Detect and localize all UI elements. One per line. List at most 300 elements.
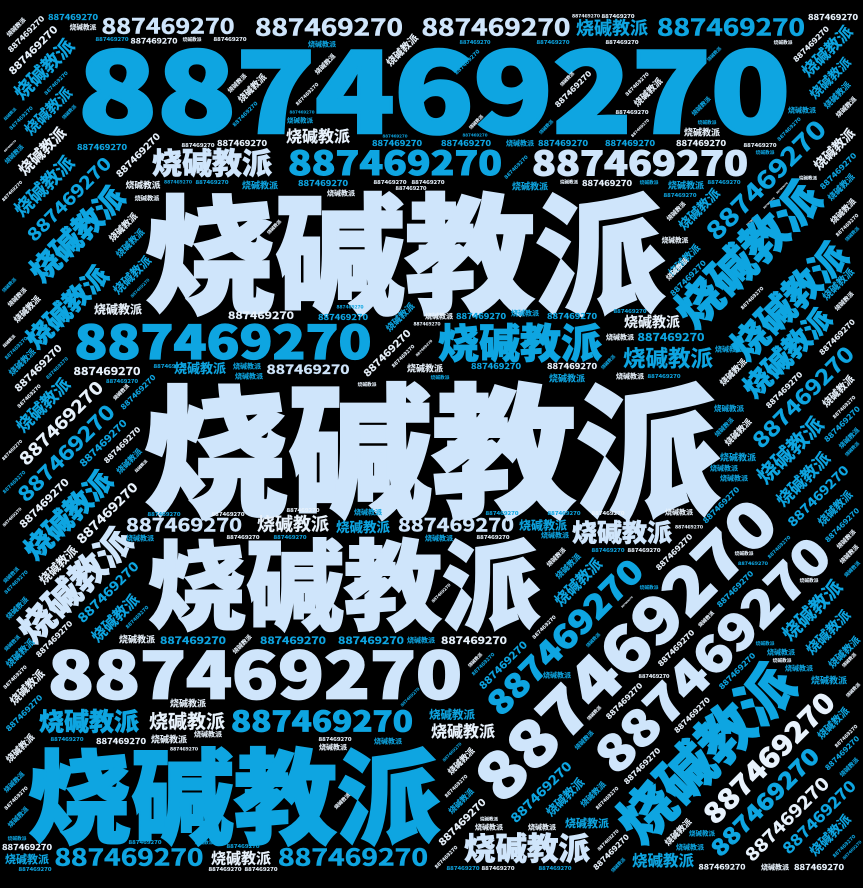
- small horizontal words, upper half: 烧碱教派: [126, 179, 161, 190]
- diagonal words, right column: 烧碱教派: [838, 543, 860, 565]
- medium horizontal words: 烧碱教派: [464, 831, 590, 867]
- diagonal words, left column: 烧碱教派: [106, 210, 140, 244]
- diagonal words, right column: 烧碱教派: [737, 303, 838, 404]
- small horizontal words, upper half: 887469270: [290, 109, 315, 115]
- diagonal words, centre gaps: 887469270: [453, 48, 481, 76]
- diagonal words, right column: 烧碱教派: [819, 265, 857, 303]
- diagonal words, right column: 887469270: [834, 724, 859, 749]
- diagonal words, centre gaps: 887469270: [621, 745, 664, 787]
- diagonal words, centre gaps: 烧碱教派: [609, 856, 627, 874]
- diagonal words, right column: 887469270: [738, 770, 834, 866]
- diagonal words, left column: 887469270: [45, 356, 70, 381]
- small horizontal words, lower half: 烧碱教派: [767, 648, 795, 657]
- small horizontal words, lower half: 887469270: [338, 632, 404, 647]
- diagonal words, right column: 烧碱教派: [723, 416, 754, 448]
- small horizontal words, lower half: 烧碱教派: [528, 823, 556, 832]
- small horizontal words, middle band: 烧碱教派: [519, 517, 567, 532]
- small horizontal words, middle band: 烧碱教派: [126, 534, 154, 543]
- small horizontal words, middle band: 887469270: [547, 311, 597, 322]
- diagonal words, left column: 烧碱教派: [113, 226, 147, 260]
- diagonal words, right column: 887469270: [778, 776, 861, 858]
- small horizontal words, middle band: 烧碱教派: [606, 333, 634, 342]
- small horizontal words, upper half: [48, 12, 858, 244]
- diagonal words, right column: [655, 22, 863, 866]
- small horizontal words, middle band: 烧碱教派: [714, 403, 744, 413]
- diagonal words, centre gaps: 887469270: [552, 68, 595, 110]
- word: giant blue number: 887469270: [78, 5, 790, 165]
- small horizontal words, lower half: 烧碱教派: [785, 664, 813, 673]
- diagonal words, left column: 烧碱教派: [7, 667, 48, 708]
- medium horizontal words: 烧碱教派: [632, 851, 694, 870]
- medium horizontal words: 887469270: [102, 10, 234, 40]
- diagonal words, left column: 烧碱教派: [18, 465, 119, 566]
- word: pale phrase, lower centre: 烧碱教派: [148, 532, 540, 642]
- diagonal words, left column: 887469270: [3, 785, 30, 812]
- small horizontal words, upper half: 887469270: [96, 36, 128, 43]
- small horizontal words, middle band: 烧碱教派: [358, 381, 377, 388]
- diagonal words, left column: 887469270: [113, 130, 163, 180]
- small horizontal words, middle band: 烧碱教派: [616, 372, 644, 381]
- diagonal words, centre gaps: 烧碱教派: [537, 118, 555, 136]
- medium horizontal words: 烧碱教派: [572, 519, 672, 547]
- diagonal words, right column: 烧碱教派: [690, 95, 712, 117]
- diagonal words, left column: 887469270: [101, 424, 144, 466]
- small horizontal words, middle band: 烧碱教派: [354, 508, 382, 517]
- diagonal words, left column: 887469270: [10, 397, 120, 507]
- diagonal words, left column: 887469270: [73, 557, 142, 626]
- diagonal words, centre gaps: 887469270: [595, 786, 620, 811]
- diagonal words, right column: 烧碱教派: [807, 55, 854, 102]
- diagonal words, right column: 887469270: [767, 535, 792, 560]
- small horizontal words, lower half: 烧碱教派: [151, 733, 187, 744]
- diagonal words, centre gaps: [226, 31, 713, 874]
- word: large blue phrase, bottom left: 烧碱教派: [28, 742, 440, 857]
- small horizontal words, lower half: 烧碱教派: [170, 697, 206, 708]
- small horizontal words, middle band: 887469270: [414, 322, 441, 328]
- small horizontal words, middle band: 887469270: [471, 361, 521, 372]
- diagonal words, right column: 887469270: [817, 150, 860, 192]
- small horizontal words, upper half: 烧碱教派: [788, 106, 816, 115]
- small horizontal words, upper half: 烧碱教派: [668, 179, 704, 190]
- diagonal words, left column: 烧碱教派: [112, 383, 131, 402]
- diagonal words, left column: 887469270: [125, 605, 150, 630]
- small horizontal words, middle band: 887469270: [148, 511, 180, 518]
- small horizontal words, lower half: 887469270: [260, 632, 326, 647]
- diagonal words, right column: 烧碱教派: [828, 196, 858, 226]
- small horizontal words, upper half: 烧碱教派: [242, 179, 278, 190]
- small horizontal words, upper half: 烧碱教派: [70, 22, 97, 31]
- diagonal words, right column: 887469270: [783, 461, 852, 530]
- small horizontal words, upper half: 887469270: [460, 39, 491, 46]
- diagonal words, left column: 887469270: [5, 13, 48, 55]
- medium horizontal words: 烧碱教派: [429, 707, 475, 721]
- medium horizontal words: 烧碱教派: [257, 515, 329, 535]
- small horizontal words, middle band: 887469270: [212, 511, 244, 518]
- small horizontal words, middle band: 887469270: [738, 561, 768, 567]
- small horizontal words, upper half: 烧碱教派: [308, 40, 336, 49]
- small horizontal words, middle band: 烧碱教派: [407, 362, 443, 373]
- small horizontal words, lower half: 887469270: [638, 673, 670, 680]
- diagonal words, right column: 烧碱教派: [843, 560, 862, 579]
- small horizontal words, lower half: 烧碱教派: [773, 657, 792, 664]
- diagonal words, left column: 烧碱教派: [3, 143, 25, 165]
- diagonal words, centre gaps: 烧碱教派: [231, 633, 253, 655]
- small horizontal words, upper half: 烧碱教派: [640, 179, 659, 186]
- small horizontal words, upper half: 烧碱教派: [327, 189, 355, 198]
- small horizontal words, lower half: 烧碱教派: [543, 671, 571, 680]
- small horizontal words, upper half: 887469270: [214, 36, 246, 43]
- small horizontal words, upper half: 烧碱教派: [684, 126, 720, 137]
- small horizontal words, middle band: 烧碱教派: [431, 374, 450, 381]
- diagonal words, centre gaps: 887469270: [434, 845, 459, 870]
- small horizontal words, lower half: 烧碱教派: [689, 828, 716, 837]
- diagonal words, right column: 烧碱教派: [837, 425, 862, 450]
- small horizontal words, upper half: 887469270: [196, 179, 228, 186]
- diagonal words, centre gaps: 烧碱教派: [663, 816, 694, 848]
- diagonal words, right column: 887469270: [693, 682, 843, 832]
- diagonal words, centre gaps: 烧碱教派: [552, 556, 606, 610]
- small horizontal words, lower half: 887469270: [226, 843, 260, 850]
- diagonal words, right column: 887469270: [745, 213, 759, 227]
- diagonal words, right column: 887469270: [832, 834, 857, 859]
- diagonal words, centre gaps: 烧碱教派: [573, 729, 595, 751]
- diagonal words, left column: 烧碱教派: [4, 595, 30, 621]
- medium horizontal words: 烧碱教派: [623, 346, 713, 371]
- small horizontal words, upper half: 887469270: [374, 179, 406, 186]
- medium horizontal words: 887469270: [532, 136, 748, 185]
- small horizontal words, lower half: 887469270: [244, 866, 278, 873]
- diagonal words, centre gaps: 887469270: [414, 338, 433, 357]
- diagonal words, centre gaps: 887469270: [399, 686, 422, 708]
- medium horizontal words: 887469270: [231, 700, 413, 740]
- small horizontal words, lower half: 烧碱教派: [119, 633, 155, 644]
- diagonal words, left column: 887469270: [2, 470, 27, 495]
- medium horizontal words: 887469270: [278, 839, 428, 873]
- small horizontal words, middle band: 烧碱教派: [549, 372, 585, 383]
- diagonal words, centre gaps: 烧碱教派: [265, 218, 283, 236]
- small horizontal words, lower half: 887469270: [2, 842, 52, 853]
- medium horizontal words: 烧碱教派: [431, 722, 495, 741]
- diagonal words, right column: 烧碱教派: [840, 651, 858, 669]
- diagonal words, left column: 烧碱教派: [12, 293, 43, 325]
- diagonal words, right column: 烧碱教派: [838, 756, 860, 778]
- diagonal words, centre gaps: 887469270: [620, 595, 634, 609]
- small horizontal words, lower half: 887469270: [318, 736, 352, 743]
- diagonal words, right column: 887469270: [835, 213, 860, 238]
- small horizontal words, middle band: 887469270: [628, 547, 660, 554]
- diagonal words, right column: 887469270: [823, 734, 862, 773]
- small horizontal words, lower half: 烧碱教派: [195, 839, 214, 846]
- medium horizontal words: 烧碱教派: [336, 520, 390, 535]
- small horizontal words, middle band: 烧碱教派: [425, 312, 453, 321]
- diagonal words, right column: 887469270: [762, 196, 776, 210]
- diagonal words, centre gaps: 烧碱教派: [467, 113, 485, 131]
- diagonal words, right column: 烧碱教派: [834, 94, 859, 119]
- diagonal words, left column: 烧碱教派: [5, 16, 27, 38]
- diagonal words, left column: 887469270: [20, 150, 116, 246]
- diagonal words, left column: 烧碱教派: [2, 769, 27, 794]
- diagonal words, left column: 烧碱教派: [22, 85, 76, 139]
- diagonal words, left column: 887469270: [77, 142, 127, 153]
- diagonal words, right column: 887469270: [817, 317, 858, 358]
- small horizontal words, middle band: 烧碱教派: [235, 372, 263, 381]
- diagonal words, centre gaps: 烧碱教派: [466, 651, 484, 669]
- diagonal words, left column: [0, 13, 163, 829]
- diagonal words, left column: 烧碱教派: [6, 804, 31, 829]
- small horizontal words, upper half: 烧碱教派: [287, 115, 314, 124]
- small horizontal words, lower half: 887469270: [441, 632, 507, 647]
- diagonal words, right column: 烧碱教派: [807, 812, 854, 859]
- diagonal words, right column: 887469270: [823, 506, 862, 545]
- diagonal words, centre gaps: 887469270: [231, 100, 259, 128]
- small horizontal words, middle band: 烧碱教派: [720, 451, 756, 462]
- small horizontal words, middle band: 887469270: [592, 547, 624, 554]
- diagonal words, centre gaps: 烧碱教派: [543, 775, 587, 819]
- diagonal words, left column: 烧碱教派: [3, 731, 37, 765]
- small horizontal words, lower half: 烧碱教派: [811, 674, 847, 685]
- medium horizontal words: 887469270: [255, 9, 403, 43]
- small horizontal words, middle band: 887469270: [614, 308, 646, 315]
- medium horizontal words: 887469270: [74, 307, 372, 373]
- small horizontal words, middle band: 887469270: [286, 507, 320, 514]
- small horizontal words, upper half: 887469270: [462, 132, 488, 138]
- word: large pale phrase, upper: 烧碱教派: [145, 185, 665, 331]
- diagonal words, left column: 烧碱教派: [3, 636, 37, 670]
- small horizontal words, lower half: 887469270: [160, 632, 226, 647]
- diagonal words, right column: 887469270: [775, 181, 789, 195]
- small horizontal words, middle band: 887469270: [274, 534, 306, 541]
- diagonal words, right column: 烧碱教派: [826, 171, 857, 203]
- diagonal words, right column: 烧碱教派: [844, 681, 862, 699]
- diagonal words, right column: 887469270: [832, 395, 857, 420]
- small horizontal words, lower half: 887469270: [128, 839, 162, 846]
- small horizontal words, upper half: 887469270: [48, 12, 98, 23]
- diagonal words, right column: 烧碱教派: [697, 610, 716, 629]
- small horizontal words, lower half: 887469270: [482, 865, 514, 872]
- diagonal words, right column: 烧碱教派: [814, 704, 852, 742]
- diagonal words, centre gaps: 烧碱教派: [545, 546, 567, 568]
- small horizontal words, upper half: 887469270: [372, 138, 422, 149]
- diagonal words, centre gaps: 887469270: [591, 832, 632, 873]
- diagonal words, left column: 887469270: [15, 474, 72, 531]
- diagonal words, right column: 烧碱教派: [713, 416, 735, 438]
- diagonal words, right column: 887469270: [740, 286, 765, 311]
- diagonal words, left column: 烧碱教派: [24, 181, 132, 289]
- small horizontal words, middle band: 烧碱教派: [800, 577, 819, 584]
- diagonal words, centre gaps: 烧碱教派: [584, 631, 602, 649]
- diagonal words, centre gaps: 887469270: [506, 757, 575, 826]
- diagonal words, centre gaps: 887469270: [435, 795, 489, 849]
- diagonal words, left column: 887469270: [43, 70, 70, 97]
- diagonal words, centre gaps: 887469270: [596, 828, 621, 852]
- diagonal words, right column: 烧碱教派: [803, 607, 854, 658]
- small horizontal words, lower half: 烧碱教派: [761, 863, 789, 872]
- diagonal words, left column: 烧碱教派: [13, 375, 74, 436]
- small horizontal words, middle band: 烧碱教派: [174, 361, 226, 376]
- diagonal words, right column: 烧碱教派: [843, 225, 861, 243]
- small horizontal words, lower half: 烧碱教派: [756, 640, 775, 647]
- diagonal words, right column: 烧碱教派: [665, 171, 832, 338]
- diagonal words, left column: 887469270: [2, 664, 29, 691]
- diagonal words, right column: 烧碱教派: [778, 576, 847, 645]
- diagonal words, left column: 烧碱教派: [0, 276, 18, 294]
- diagonal words, left column: 887469270: [72, 478, 141, 547]
- small horizontal words, middle band: 烧碱教派: [720, 474, 748, 483]
- small horizontal words, middle band: 烧碱教派: [715, 345, 743, 354]
- small horizontal words, middle band: 887469270: [476, 534, 510, 541]
- diagonal words, left column: 887469270: [12, 374, 108, 470]
- small horizontal words, upper half: 887469270: [164, 180, 193, 186]
- word: diagonal pale number, long: 887469270: [452, 476, 794, 818]
- small horizontal words, lower half: 887469270: [446, 865, 480, 872]
- small horizontal words, upper half: 887469270: [664, 192, 696, 199]
- small horizontal words, lower half: 887469270: [18, 866, 52, 873]
- diagonal words, left column: 烧碱教派: [110, 253, 154, 297]
- diagonal words, right column: 887469270: [668, 258, 709, 299]
- diagonal words, left column: 烧碱教派: [10, 35, 79, 104]
- diagonal words, left column: 烧碱教派: [16, 125, 70, 179]
- small horizontal words, upper half: 887469270: [708, 179, 740, 186]
- diagonal words, centre gaps: 烧碱教派: [599, 353, 617, 371]
- small horizontal words, upper half: 887469270: [676, 138, 726, 149]
- diagonal words, left column: 烧碱教派: [3, 634, 22, 653]
- diagonal words, left column: 887469270: [129, 277, 152, 299]
- word: diagonal blue phrase: 烧碱教派: [605, 652, 808, 855]
- small horizontal words, middle band: 887469270: [547, 361, 597, 372]
- diagonal words, right column: 烧碱教派: [718, 356, 749, 388]
- small horizontal words, middle band: 烧碱教派: [665, 508, 693, 517]
- diagonal words, centre gaps: 烧碱教派: [631, 75, 665, 109]
- small horizontal words, lower half: 烧碱教派: [480, 816, 498, 823]
- diagonal words, centre gaps: 887469270: [441, 741, 464, 763]
- medium horizontal words: 887469270: [54, 839, 204, 873]
- diagonal words, right column: 烧碱教派: [822, 79, 853, 111]
- diagonal words, centre gaps: 烧碱教派: [383, 31, 421, 69]
- diagonal words, centre gaps: 887469270: [603, 680, 646, 722]
- small horizontal words, upper half: 887469270: [217, 138, 267, 149]
- small horizontal words, lower half: 887469270: [50, 736, 84, 743]
- diagonal words, left column: 887469270: [3, 692, 46, 734]
- small horizontal words, upper half: 887469270: [538, 138, 588, 149]
- diagonal words, centre gaps: 烧碱教派: [578, 779, 608, 809]
- diagonal words, right column: 烧碱教派: [825, 633, 863, 671]
- medium horizontal words: 887469270: [657, 9, 805, 43]
- diagonal words, right column: 887469270: [776, 116, 803, 143]
- medium horizontal words: 烧碱教派: [152, 148, 272, 181]
- small horizontal words, middle band: 887469270: [154, 363, 186, 370]
- medium horizontal words: 烧碱教派: [624, 314, 680, 330]
- diagonal words, centre gaps: 烧碱教派: [226, 72, 248, 94]
- diagonal words, left column: 887469270: [5, 22, 60, 77]
- diagonal words, right column: 887469270: [716, 650, 759, 692]
- diagonal words, centre gaps: 烧碱教派: [333, 792, 352, 811]
- small horizontal words, middle band: 烧碱教派: [710, 464, 738, 473]
- diagonal words, right column: 887469270: [763, 369, 806, 411]
- small horizontal words, middle band: 887469270: [675, 525, 704, 531]
- diagonal words, centre gaps: 烧碱教派: [558, 70, 576, 88]
- diagonal words, left column: 887469270: [8, 105, 35, 132]
- diagonal words, right column: 887469270: [822, 404, 863, 445]
- small horizontal words, upper half: 887469270: [605, 138, 655, 149]
- diagonal words, centre gaps: 烧碱教派: [235, 71, 269, 105]
- small horizontal words, middle band: 烧碱教派: [233, 362, 261, 371]
- diagonal words, right column: 887469270: [714, 568, 757, 610]
- small horizontal words, lower half: [2, 632, 847, 873]
- small horizontal words, upper half: 887469270: [396, 185, 427, 192]
- small horizontal words, lower half: 烧碱教派: [5, 852, 49, 866]
- diagonal words, left column: 烧碱教派: [60, 103, 78, 121]
- small horizontal words, upper half: 887469270: [572, 14, 601, 20]
- diagonal words, right column: 烧碱教派: [665, 241, 703, 279]
- small horizontal words, upper half: 烧碱教派: [756, 149, 775, 156]
- diagonal words, right column: 887469270: [744, 338, 860, 454]
- medium horizontal words: 烧碱教派: [576, 19, 648, 39]
- diagonal words, left column: 烧碱教派: [114, 446, 144, 476]
- small horizontal words, lower half: 烧碱教派: [475, 823, 503, 832]
- small horizontal words, upper half: 烧碱教派: [662, 235, 689, 244]
- diagonal words, centre gaps: 887469270: [360, 326, 414, 380]
- diagonal words, left column: 烧碱教派: [7, 346, 38, 378]
- diagonal words, left column: 烧碱教派: [1, 333, 16, 348]
- small horizontal words, upper half: 887469270: [744, 142, 776, 149]
- diagonal words, centre gaps: 烧碱教派: [313, 51, 338, 76]
- small horizontal words, lower half: 烧碱教派: [194, 730, 222, 739]
- small horizontal words, lower half: 887469270: [698, 863, 746, 873]
- diagonal words, centre gaps: 887469270: [672, 695, 713, 736]
- small horizontal words, middle band: 烧碱教派: [94, 301, 142, 316]
- diagonal words, centre gaps: 887469270: [476, 637, 530, 692]
- small horizontal words, middle band: 887469270: [486, 510, 518, 517]
- diagonal words, left column: 887469270: [16, 383, 43, 410]
- diagonal words, centre gaps: 887469270: [444, 774, 469, 799]
- small horizontal words, middle band: 烧碱教派: [425, 534, 453, 543]
- small horizontal words, upper half: 887469270: [808, 12, 858, 23]
- small horizontal words, middle band: [74, 301, 819, 591]
- small horizontal words, upper half: 887469270: [606, 39, 638, 46]
- small horizontal words, upper half: 烧碱教派: [512, 180, 548, 191]
- small horizontal words, lower half: 887469270: [208, 866, 242, 873]
- small horizontal words, upper half: 887469270: [130, 37, 178, 47]
- diagonal words, centre gaps: 887469270: [430, 582, 453, 604]
- small horizontal words, upper half: 887469270: [382, 133, 408, 139]
- small horizontal words, middle band: 887469270: [456, 311, 506, 322]
- small horizontal words, lower half: 烧碱教派: [319, 743, 347, 752]
- small horizontal words, upper half: 887469270: [616, 109, 648, 116]
- diagonal words, right column: 烧碱教派: [833, 290, 855, 312]
- word: pale number, lower left: 887469270: [48, 626, 462, 718]
- small horizontal words, middle band: 887469270: [318, 312, 368, 323]
- small horizontal words, lower half: 烧碱教派: [407, 636, 435, 645]
- small horizontal words, lower half: 887469270: [794, 862, 844, 873]
- diagonal words, right column: 887469270: [841, 839, 863, 861]
- diagonal words, right column: 烧碱教派: [665, 200, 687, 222]
- diagonal words, right column: 887469270: [697, 111, 833, 247]
- diagonal words, right column: 887469270: [700, 484, 743, 526]
- diagonal words, right column: 烧碱教派: [676, 186, 723, 233]
- small horizontal words, upper half: 887469270: [182, 142, 214, 149]
- medium horizontal words: 887469270: [422, 9, 570, 43]
- word: diagonal blue number: 887469270: [476, 548, 653, 725]
- medium horizontal words: 887469270: [398, 512, 514, 538]
- diagonal words, right column: 烧碱教派: [811, 126, 858, 173]
- small horizontal words, lower half: 887469270: [96, 736, 146, 747]
- diagonal words, right column: 烧碱教派: [798, 22, 857, 81]
- diagonal words, right column: 烧碱教派: [819, 372, 857, 410]
- medium horizontal words: 烧碱教派: [286, 127, 350, 146]
- diagonal words, right column: 烧碱教派: [835, 528, 857, 550]
- diagonal words, right column: 烧碱教派: [843, 440, 861, 458]
- medium horizontal words: 烧碱教派: [149, 711, 225, 733]
